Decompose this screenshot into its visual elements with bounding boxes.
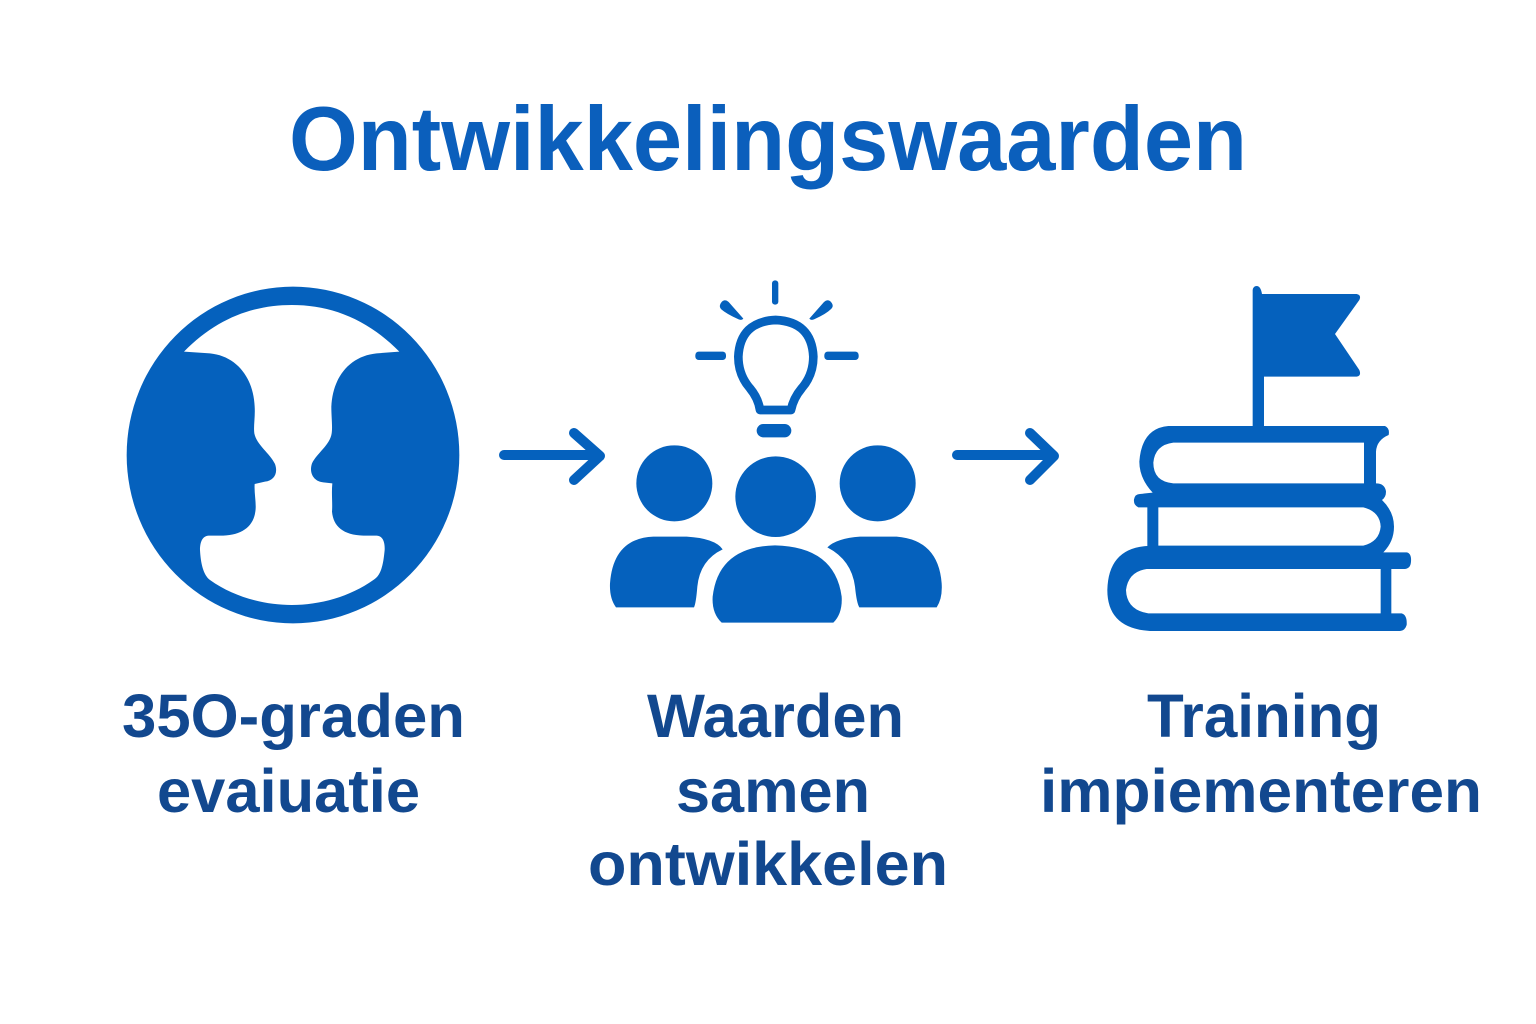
label: Training implementeren: impiementeren — [1040, 757, 1482, 825]
label: 350-graden evaluatie: 35O-graden — [122, 682, 465, 750]
label: Training implementeren: Training — [1147, 682, 1381, 750]
label: Waarden samen ontwikkelen — [588, 682, 948, 898]
icon: group of people with light bulb — [610, 280, 942, 623]
people — [610, 445, 942, 623]
title: Ontwikkelingswaarden — [289, 89, 1247, 190]
label: Training implementeren — [1040, 682, 1482, 825]
label: 350-graden evaluatie: evaiuatie — [157, 757, 420, 825]
arrow: evaluation to values — [504, 433, 600, 480]
arrow: values to training — [957, 433, 1054, 480]
label: Waarden samen ontwikkelen: Waarden — [647, 682, 904, 750]
icon: stack of books with flag — [1107, 286, 1411, 631]
label: 350-graden evaluatie — [122, 682, 465, 825]
label: Waarden samen ontwikkelen: ontwikkelen — [588, 830, 948, 898]
label: Waarden samen ontwikkelen: samen — [676, 757, 870, 825]
icon: two faces in circle (360-degree evaluation) — [127, 287, 459, 623]
icon: light bulb with rays — [695, 280, 859, 437]
